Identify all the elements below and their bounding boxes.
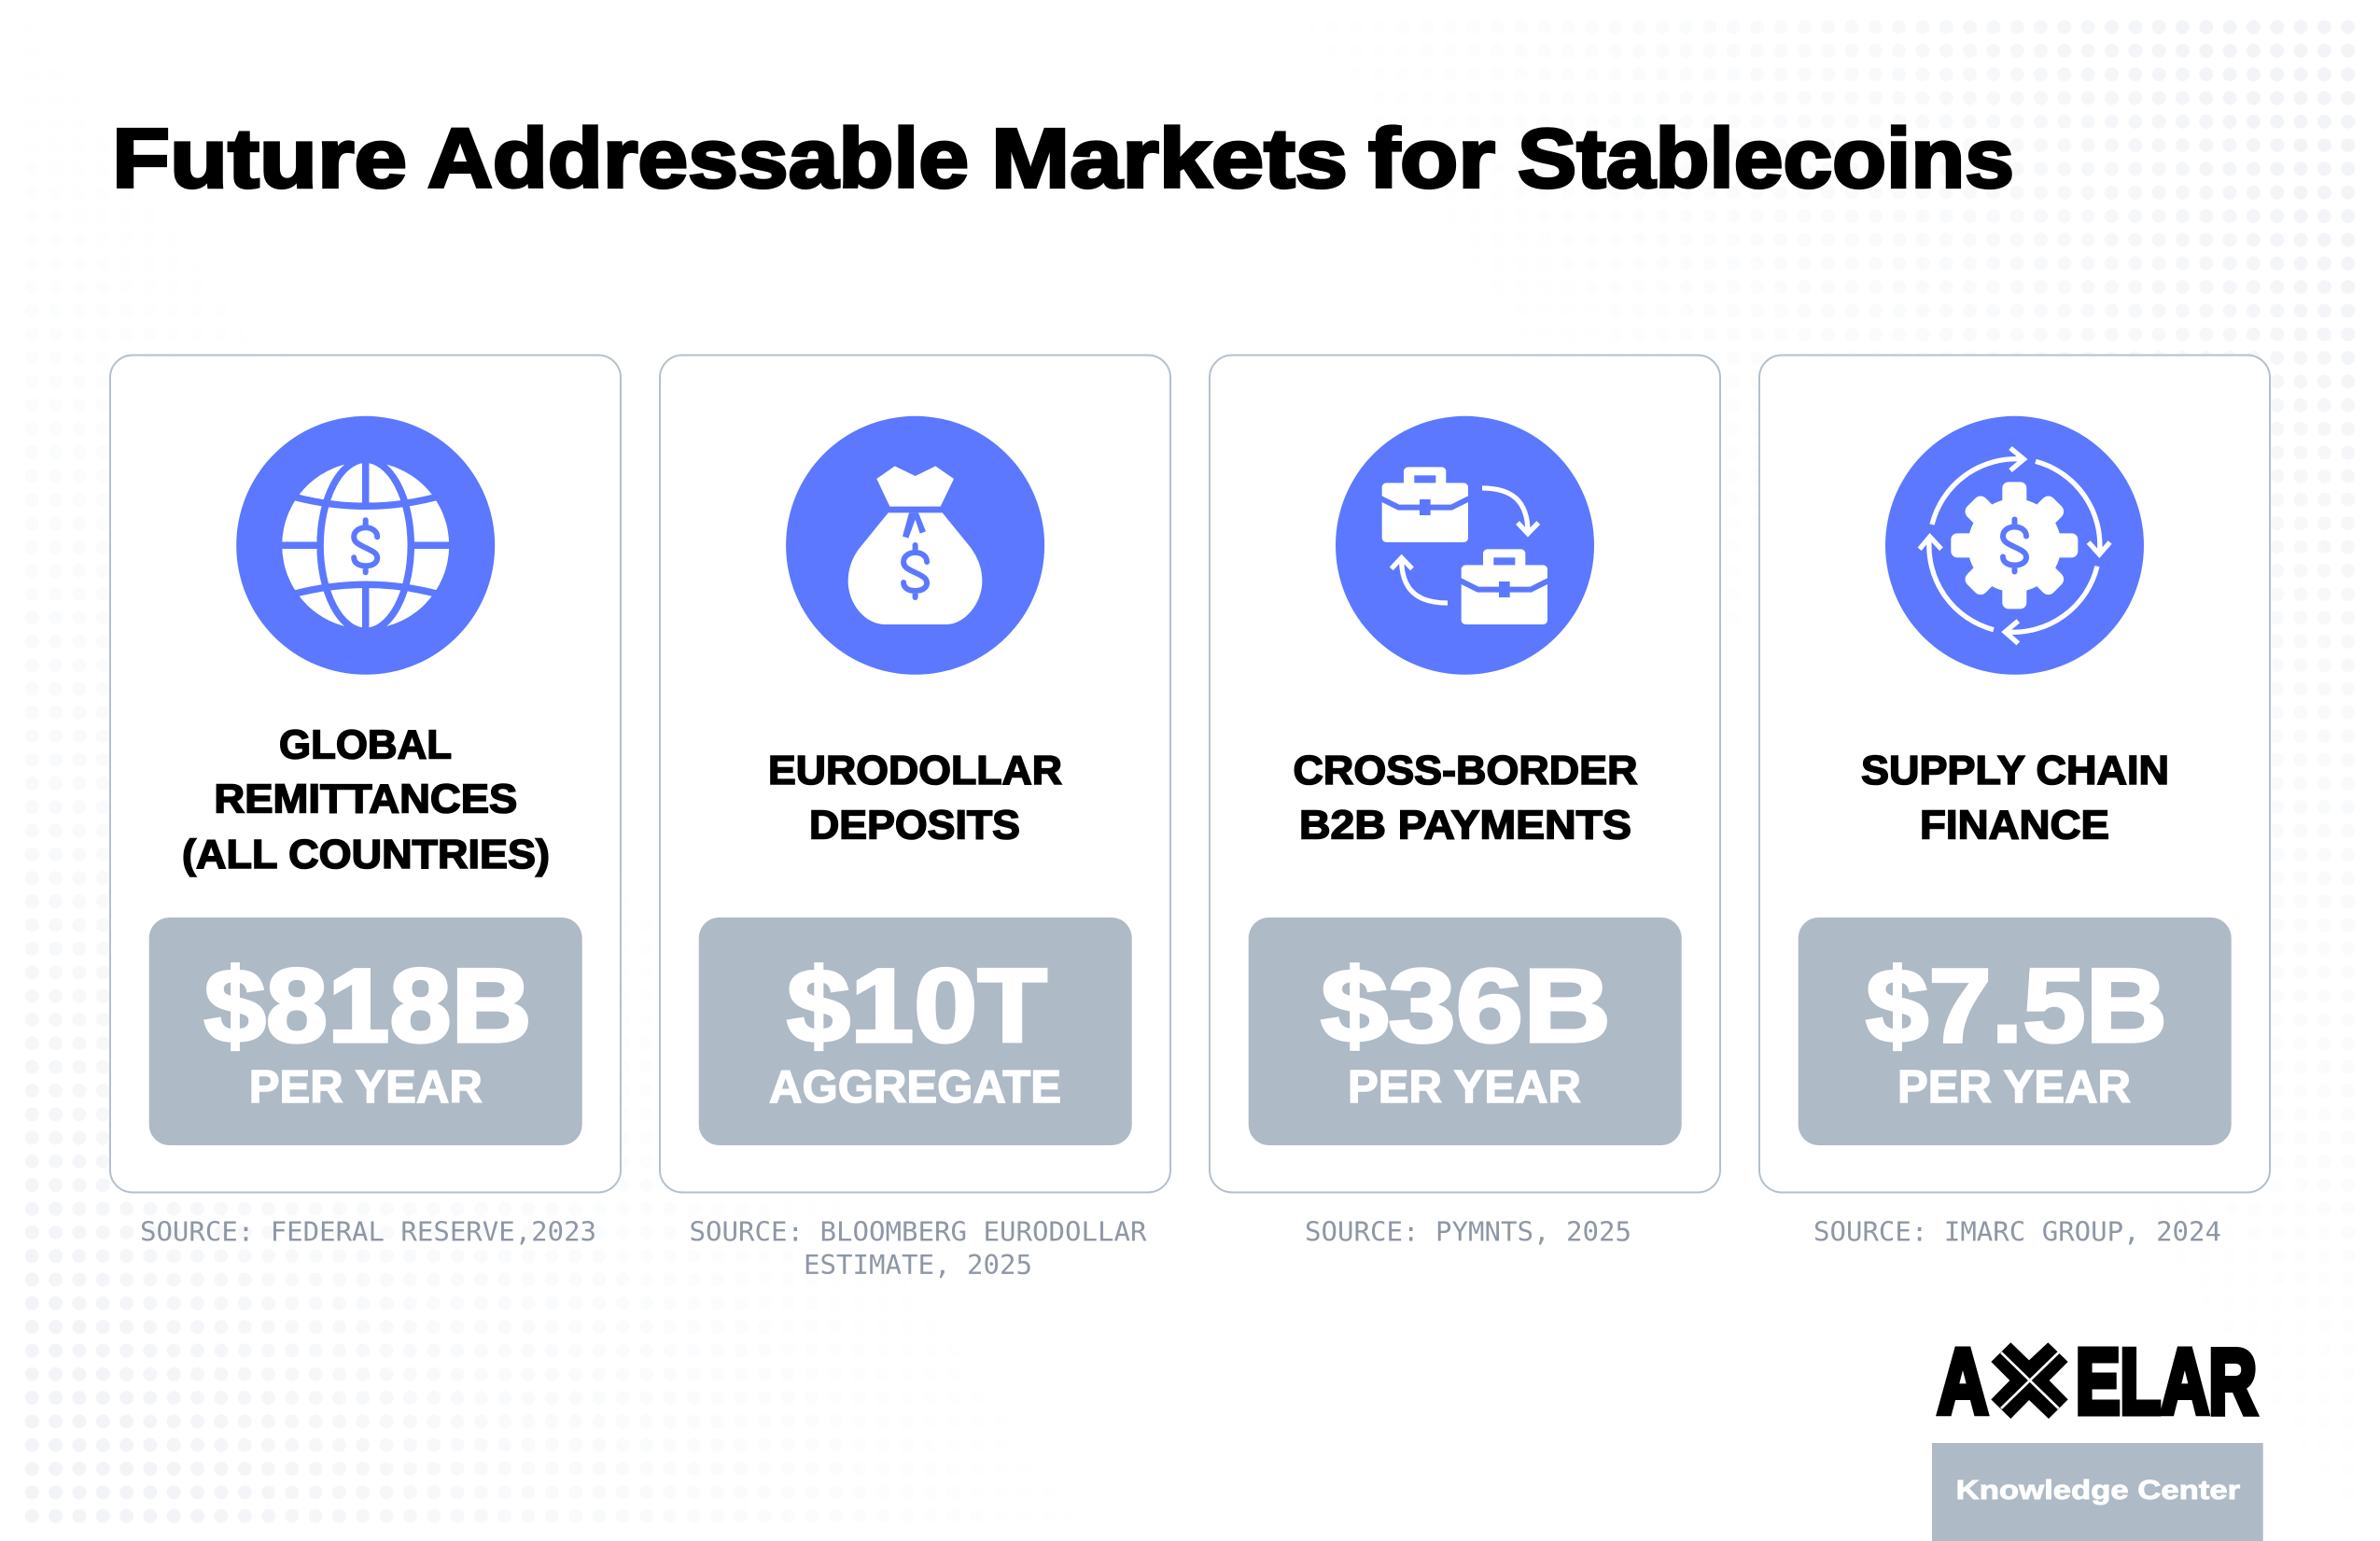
heading: eurodollar deposits (768, 748, 1062, 848)
icon: globe with dollar (236, 416, 495, 675)
heading: supply chain finance (1861, 748, 2169, 848)
value pill: $36B per year (1249, 918, 1682, 1145)
panel: global remittances (110, 355, 621, 1193)
logo: axelar (1938, 1330, 2257, 1433)
logo: axelar: A (1938, 1330, 1988, 1433)
source: bloomberg (689, 1216, 1147, 1281)
value pill: $818B per year (149, 918, 582, 1145)
heading: supply chain finance: SUPPLY CHAIN (1861, 748, 2169, 793)
source: federal reserve: SOURCE: FEDERAL RESERVE,2023 (140, 1216, 596, 1247)
value pill: $818B per year: PER YEAR (249, 1061, 483, 1113)
source: imarc group: SOURCE: IMARC GROUP, 2024 (1813, 1216, 2221, 1247)
badge: knowledge center (1932, 1443, 2263, 1541)
value pill: $10T aggregate: $10T (787, 947, 1047, 1064)
title: Markets (991, 112, 1348, 205)
value pill: $7.5B per year: PER YEAR (1897, 1061, 2131, 1113)
panel: supply chain finance (1759, 355, 2270, 1193)
heading: supply chain finance: FINANCE (1920, 803, 2109, 848)
title: Future (112, 112, 407, 205)
value pill: $10T aggregate: AGGREGATE (769, 1061, 1061, 1113)
heading: global remittances: REMITTANCES (214, 777, 517, 822)
icon: gear with cycle arrows (1885, 416, 2144, 675)
title: for (1368, 112, 1495, 205)
source: bloomberg: ESTIMATE, 2025 (804, 1250, 1032, 1281)
value pill: $818B per year: $818B (204, 947, 532, 1064)
icon: briefcases exchange (1336, 416, 1594, 675)
value pill: $36B per year: $36B (1321, 947, 1611, 1064)
heading: global remittances (182, 722, 550, 877)
panel: cross-border b2b payments (1210, 355, 1720, 1193)
value pill: $10T aggregate (699, 918, 1132, 1145)
title: Addressable (427, 112, 969, 205)
heading: cross-border b2b payments (1294, 748, 1637, 848)
heading: global remittances: GLOBAL (279, 722, 452, 767)
icon: money bag (786, 416, 1044, 675)
title (112, 112, 2014, 205)
value pill: $36B per year: PER YEAR (1348, 1061, 1581, 1113)
heading: eurodollar deposits: DEPOSITS (809, 803, 1020, 848)
panel: eurodollar deposits (660, 355, 1170, 1193)
heading: eurodollar deposits: EURODOLLAR (768, 748, 1062, 793)
source: bloomberg: SOURCE: BLOOMBERG EURODOLLAR (689, 1216, 1147, 1247)
logo: axelar: ELAR (2076, 1330, 2257, 1433)
badge: knowledge center: Knowledge Center (1956, 1476, 2240, 1506)
source: pymnts: SOURCE: PYMNTS, 2025 (1305, 1216, 1631, 1247)
heading: cross-border b2b payments: B2B PAYMENTS (1299, 803, 1631, 848)
heading: cross-border b2b payments: CROSS-BORDER (1294, 748, 1637, 793)
value pill: $7.5B per year: $7.5B (1866, 947, 2167, 1064)
value pill: $7.5B per year (1799, 918, 2232, 1145)
title: Stablecoins (1518, 112, 2014, 205)
heading: global remittances: (ALL COUNTRIES) (182, 832, 550, 877)
